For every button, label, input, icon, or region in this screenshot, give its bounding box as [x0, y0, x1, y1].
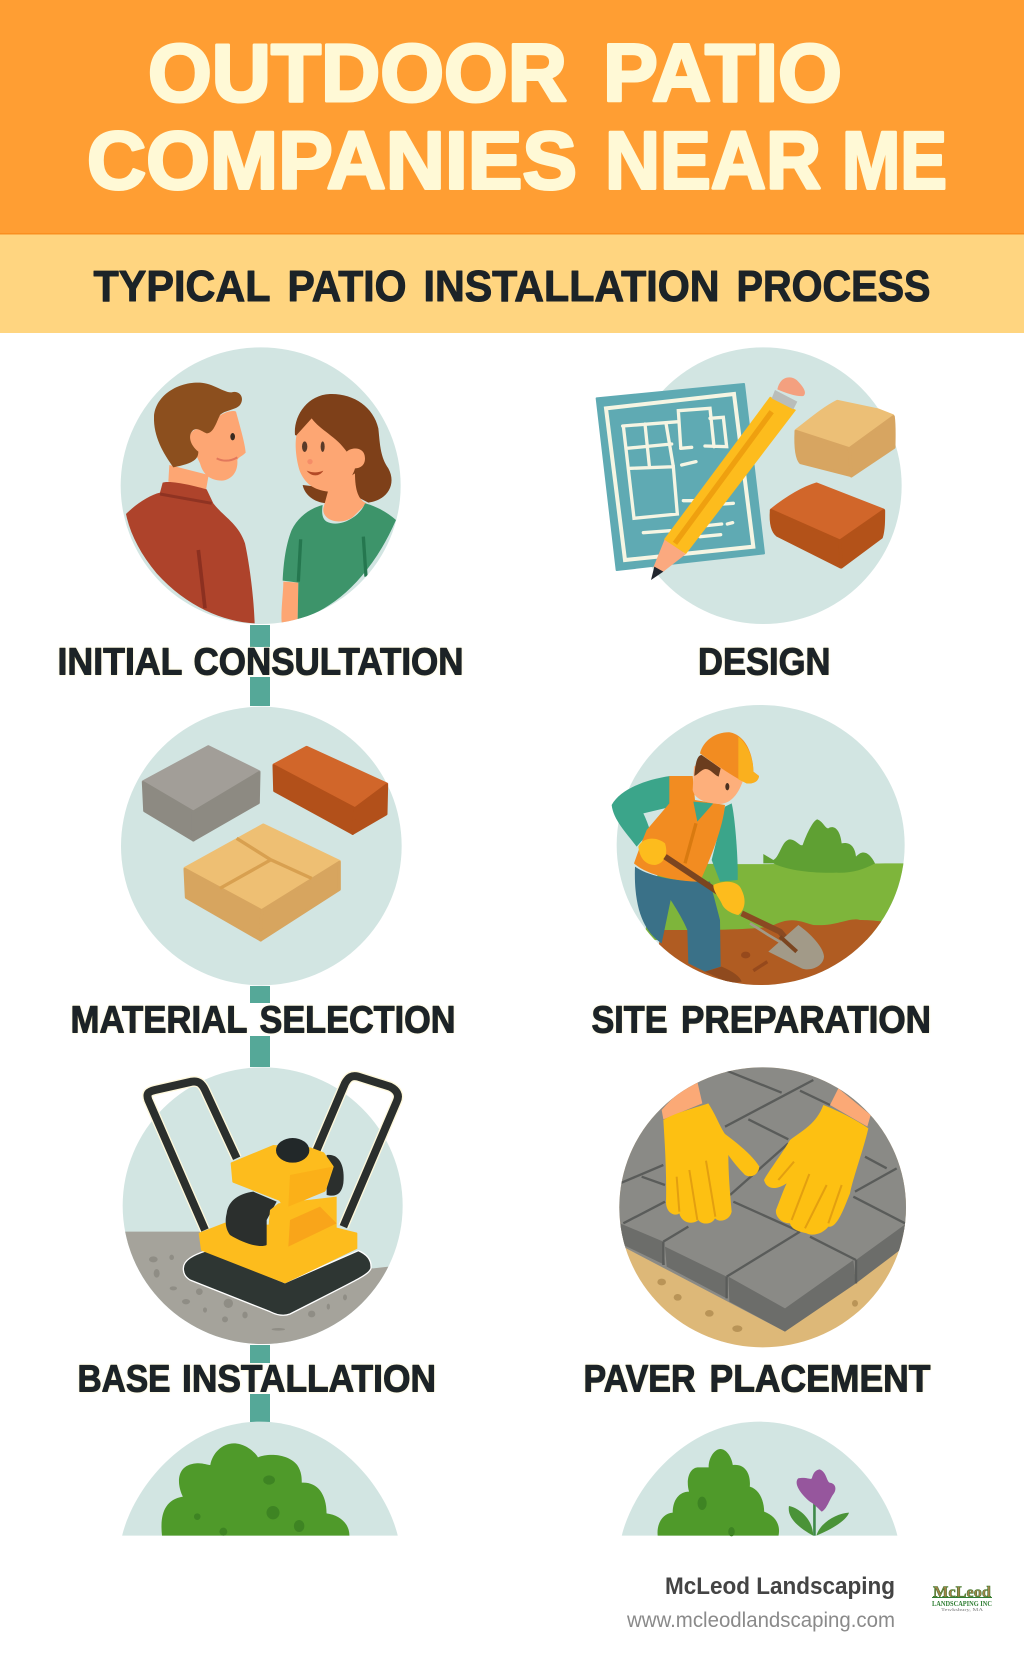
label: paver placement: PAVER	[584, 1358, 696, 1400]
logo: McLeod Landscaping: Tewksbury, MA	[941, 1607, 984, 1613]
header banner	[0, 0, 1024, 234]
woman	[281, 394, 396, 623]
label: material selection: MATERIAL	[70, 1000, 248, 1042]
title: PATIO	[603, 28, 842, 119]
subtitle: TYPICAL	[94, 262, 270, 311]
left glove	[663, 1103, 759, 1224]
label: site preparation: PREPARATION	[681, 1000, 931, 1042]
tan paver	[185, 825, 339, 940]
blueprint	[597, 384, 764, 570]
grass and soil	[643, 863, 907, 990]
shovel	[742, 913, 824, 969]
subtitle band	[0, 234, 1024, 333]
icon: paver placement	[617, 1060, 910, 1347]
icon: initial consultation	[121, 347, 401, 624]
label: material selection	[70, 1000, 456, 1042]
label: initial consultation	[58, 642, 464, 684]
label: paver placement	[584, 1358, 930, 1400]
subtitle: INSTALLATION	[424, 262, 720, 311]
label: paver placement: PLACEMENT	[710, 1358, 930, 1400]
title: COMPANIES	[87, 116, 577, 206]
footer company name: McLeod Landscaping	[665, 1573, 895, 1600]
icon: site preparation	[612, 705, 907, 990]
compactor plate	[183, 1251, 371, 1315]
pencil	[651, 377, 805, 580]
footer website: www.mcleodlandscaping.com	[626, 1609, 895, 1632]
label: base installation: BASE	[78, 1358, 170, 1400]
icon: design	[597, 347, 902, 624]
gray paver	[143, 747, 259, 840]
subtitle: PROCESS	[736, 262, 930, 311]
icon: cropped shrub and flower right	[622, 1422, 897, 1536]
icon: material selection	[121, 707, 402, 985]
label: design: DESIGN	[698, 642, 830, 684]
label: material selection: SELECTION	[260, 1000, 456, 1042]
logo: McLeod Landscaping: LANDSCAPING INC	[932, 1599, 992, 1608]
title: ME	[842, 116, 947, 206]
title	[87, 28, 947, 206]
label: initial consultation: CONSULTATION	[194, 642, 464, 684]
label: base installation	[78, 1358, 436, 1400]
label: initial consultation: INITIAL	[58, 642, 182, 684]
worker	[612, 732, 759, 972]
compactor handles	[147, 1076, 398, 1230]
arms	[662, 1082, 871, 1127]
icon: cropped shrub left	[122, 1422, 398, 1536]
logo: McLeod Landscaping	[932, 1584, 992, 1613]
label: site preparation: SITE	[592, 1000, 668, 1042]
logo: McLeod Landscaping: McLeod	[933, 1584, 991, 1601]
tan paver	[796, 401, 894, 476]
orange paver	[771, 484, 884, 567]
gravel	[125, 1232, 388, 1344]
subtitle	[94, 262, 930, 311]
label: base installation: INSTALLATION	[182, 1358, 436, 1400]
right glove	[764, 1105, 868, 1235]
subtitle: PATIO	[288, 262, 406, 311]
man	[126, 383, 255, 623]
paving stones	[617, 1060, 910, 1332]
orange paver	[274, 747, 387, 833]
title: OUTDOOR	[148, 28, 567, 119]
compactor body	[199, 1138, 357, 1283]
flower	[789, 1469, 849, 1536]
title: NEAR	[605, 116, 821, 206]
bush	[763, 819, 875, 873]
icon: base installation	[120, 1067, 403, 1350]
label: site preparation	[592, 1000, 931, 1042]
connector: process line	[250, 625, 270, 1422]
